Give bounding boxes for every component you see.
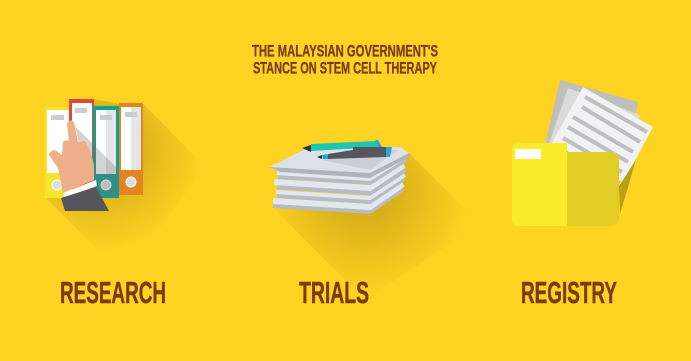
front paper bbox=[548, 87, 653, 190]
icon: folder with documents bbox=[512, 80, 653, 226]
top sheet bbox=[270, 147, 409, 178]
label: registry: REGISTRY bbox=[521, 275, 617, 310]
title: STANCE ON STEM CELL THERAPY bbox=[253, 60, 437, 78]
stack shadow bbox=[273, 153, 480, 300]
title bbox=[252, 42, 438, 78]
grey pen bbox=[317, 147, 392, 159]
teal binder bbox=[93, 106, 119, 198]
teal pen bbox=[302, 140, 382, 152]
folder flap shadow bbox=[619, 160, 636, 214]
title: THE MALAYSIAN GOVERNMENT'S bbox=[252, 42, 438, 60]
red binder bbox=[69, 99, 94, 189]
hand bbox=[49, 120, 94, 193]
hand shadow on binders bbox=[75, 126, 119, 198]
folder bbox=[512, 143, 619, 226]
binder shadow bbox=[46, 99, 205, 277]
icon: binders with hand bbox=[45, 99, 205, 277]
back paper bbox=[545, 80, 638, 190]
suit sleeve bbox=[61, 187, 109, 211]
paper layers bbox=[273, 156, 406, 212]
shirt cuff bbox=[63, 180, 97, 197]
icon: paper stack with pens bbox=[270, 140, 480, 300]
middle paper bbox=[547, 88, 640, 185]
orange binder bbox=[119, 103, 143, 195]
label: trials: TRIALS bbox=[299, 275, 369, 310]
yellow binder bbox=[45, 107, 72, 198]
label: research: RESEARCH bbox=[60, 275, 166, 310]
